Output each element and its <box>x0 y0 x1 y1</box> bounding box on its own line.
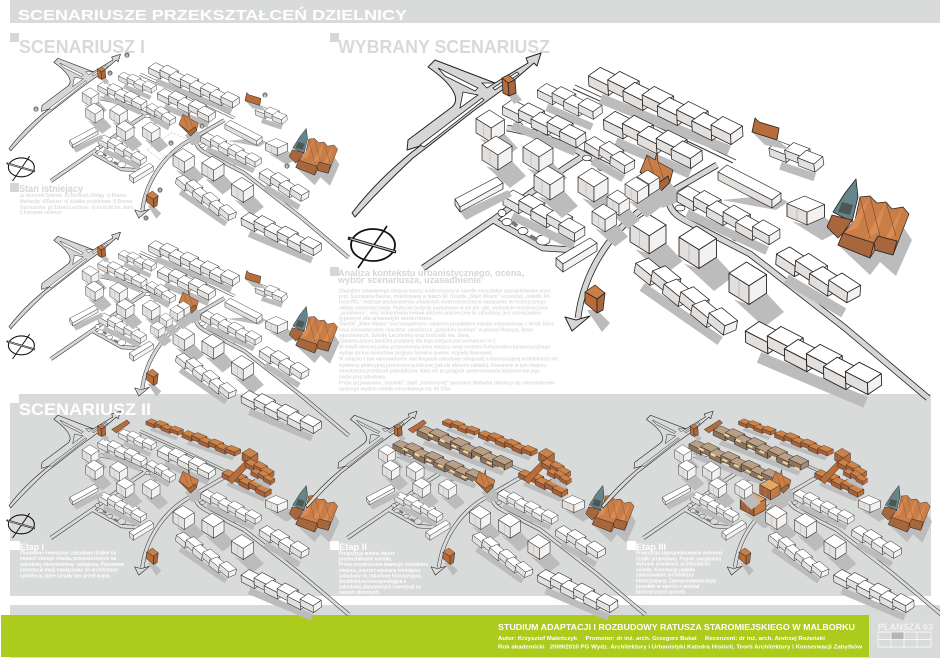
text block: etap II: Architektura korespondująca z <box>339 579 406 585</box>
title bar: SCENARIUSZE PRZEKSZTAŁCEŃ DZIELNICY <box>18 7 407 24</box>
text block: stan istniejacy: i) kierunek centrum <box>20 210 62 216</box>
text block: etap I: Etap I <box>20 542 44 552</box>
text block: etap III: działki projektowej. Projekt uwzględnia <box>636 556 722 562</box>
text block: analiza kontekstu: wydaje się być niemożliwa (względy formalno prawne, względy finansowe). <box>338 350 493 356</box>
text block: etap II: murach obronnych. <box>339 590 380 596</box>
text block: etap I <box>10 541 124 579</box>
text block: etap I: Planowane inwestycje- zabudowa działek na <box>20 551 117 557</box>
text block: etap III: wybrany scenariusz przekształceń <box>635 562 710 568</box>
heading: scenariusz II <box>10 394 151 419</box>
map: etap I <box>7 411 349 620</box>
plansza number and sheet index: PLANSZA 03 <box>878 622 933 632</box>
text block: analiza kontekstu: W związku z tym wprowadzenie nad Nogatem zabudowy usługowej o historyzującej architekturze nie <box>339 357 558 363</box>
map labels a-i: c <box>109 71 111 75</box>
text block: etap II: zabudową planowanych inwestycji na <box>339 585 422 591</box>
heading: scenariusz I: SCENARIUSZ I <box>19 37 145 57</box>
text block: analiza kontekstu: układu urbanistycznego. Podłużne budynki usytuowane w osi płn- płd, swobodnie rozmieszczone <box>339 305 548 311</box>
text block: etap II: miejsca, poprzez wymianę istniejącej <box>339 568 420 574</box>
plansza number and sheet index <box>878 622 933 647</box>
text block: etap I: murach starego miasta, przeznaczonych na <box>20 556 117 562</box>
text block: analiza kontekstu: wjazdowych, Szkoły Łacińskiej oraz kościoła św. Jana. <box>338 333 470 339</box>
text block: etap II: przekształcanie osiedla. <box>339 557 392 563</box>
text block: etap I: inwestycje mają nawiązywać do architektury <box>20 568 119 574</box>
footer green band <box>1 615 869 657</box>
footer green band: Autor: Krzysztof Maleńczyk Promotor: dr inż. arch. Grzegorz Bukal Recenzent: dr inż. arch. Andrzej Rożeński <box>498 636 825 642</box>
text block: analiza kontekstu <box>330 267 558 392</box>
map: scenariusz I <box>7 232 349 441</box>
text block: etap III: historyzującej. Zaproponowane bryły <box>636 578 717 584</box>
text block: etap III: powstałe w oparciu o podział <box>636 584 699 590</box>
title bar <box>10 0 940 24</box>
footer green band: Rok akademicki 2009/2010 PG Wydz. Architektury i Urbanistyki Katedra Historii, Teorii Architektury i Konserwacji Zabytków <box>498 644 863 650</box>
text block: analiza kontekstu: Analiza kontekstu urbanistycznego, ocena, <box>338 268 524 279</box>
text block: etap III: osiedla. Koncepcja zakłada <box>636 567 696 573</box>
text block: etap II: Propozycja autora- dalsze <box>339 551 395 557</box>
map labels a-i: a <box>126 53 129 57</box>
text block: analiza kontekstu: spójnego modelu osiedla mieszkalnego lat. 60 XXw. <box>339 386 451 392</box>
text block: etap I: spichlerzy, które istniały tam przed wojną. <box>20 573 111 579</box>
map: wybrany scenariusz large <box>348 53 928 406</box>
map labels a-i: h <box>286 164 288 168</box>
footer grey strip <box>10 605 940 658</box>
text block: analiza kontekstu: Zdaniem autora bardziej pożądany dla tego miejsca jest scenariusz nr 1. <box>339 339 497 345</box>
text block: analiza kontekstu: W chwili obecnej próba przywrócenia temu miejscu rangi centrum funkcjonalno kompozycyjnego <box>339 345 550 351</box>
panel: scenariusz II background <box>10 394 931 596</box>
map labels a-i: i <box>146 216 147 220</box>
heading: wybrany scenariusz: WYBRANY SCENARIUSZ <box>338 37 550 57</box>
text block: analiza kontekstu: Osiedle „Stare Miasto” jest kompletnym i spójnym przykładem osiedla mieszkalnego z lat 60, które <box>339 322 554 328</box>
text block: analiza kontekstu: Próba przywracania „starówki”, bądź „historycznej” panoramy Malborka zakończy się unicestwieniem <box>339 381 555 387</box>
text block: analiza kontekstu: tradycyjną zabudową. <box>339 375 386 381</box>
map labels a-i: b <box>35 107 38 111</box>
text block: stan istniejacy: Mariacka d)Ratusz e) działka projektowa f) Brama <box>20 199 133 205</box>
text block: analiza kontekstu: typowym dla urbanistyki modernizmu. <box>339 316 433 322</box>
map: stan istniejacy <box>7 54 349 263</box>
text block: analiza kontekstu: „punktowce”, oraz komunikacja kołowa ułożona poprzecznie do zabudowy, jest rozwiązaniem <box>339 311 541 317</box>
text block: analiza kontekstu: wytworzy atrakcyjnej przestrzeni publicznej (jak się obecnie zakłada). Powstanie w tym miejscu <box>338 363 546 369</box>
text block: stan istniejacy: a) kierunek Gdańsk b) kierunek Elbląg c) Brama <box>20 193 127 199</box>
text block: analiza kontekstu: charytyczna przestrzeń półpubliczna, która nie przyciągnie zainteresowania miejscem ani jego <box>339 369 540 375</box>
text block: stan istniejacy <box>10 183 134 216</box>
text block: etap II: Próba przywrócenia dawnego charakteru <box>339 562 428 568</box>
text block: analiza kontekstu: prof. Szczepana Bauma, zrealizowane w latach 60. Osiedle „Stare Miasto” wcześniej „osiedle XX- <box>339 294 551 300</box>
text block: analiza kontekstu: lecia PRL” realizuje postanowienia urbanistyki modernistycznej w nawiązaniu do historycznego <box>339 300 546 306</box>
text block: analiza kontekstu: Charakter omawianego miejsca tworzy modernistyczne osiedle mieszkalne zaprojektowane przez <box>339 288 551 294</box>
text block: etap III: zastosowanie architektury <box>636 573 695 579</box>
text block: analiza kontekstu: swój niepowtarzalny charakter zawdzięcza „gotyckim meblom” w postaci Ratusza, Bram <box>339 327 533 333</box>
text block: etap I: zabudowę mieszkaniową - usługową. Planowane <box>20 562 124 568</box>
map labels a-i: g <box>264 93 266 97</box>
text block: etap II: zabudowy na zabudowę historyzującą. <box>339 573 422 579</box>
text block: etap II <box>330 541 428 596</box>
heading: scenariusz II: SCENARIUSZ II <box>19 400 151 419</box>
map labels a-i: f <box>159 188 161 192</box>
text block: stan istniejacy: Garncarska g) Szkoła Łacińska h) kościół św. Jana <box>20 205 134 211</box>
text block: analiza kontekstu: wybór scenariusza, uzasadnienie <box>337 275 481 286</box>
map labels a-i: e <box>170 141 172 145</box>
text block: etap III: Propozycja zagospodarowania wybranej <box>636 551 722 557</box>
map: etap III <box>602 411 940 620</box>
text block: etap III: historycznych parceli. <box>636 590 686 596</box>
text block: stan istniejacy: Stan istniejący <box>19 184 83 195</box>
footer green band: STUDIUM ADAPTACJI I ROZBUDOWY RATUSZA STAROMIEJSKIEGO W MALBORKU <box>498 622 855 632</box>
text block: etap III: Etap III <box>636 542 666 552</box>
map labels a-i: d <box>201 124 203 128</box>
map labels a-i <box>33 52 290 221</box>
text block: etap III <box>627 541 722 596</box>
map: etap II <box>305 411 645 620</box>
text block: etap II: Etap II <box>339 542 367 552</box>
